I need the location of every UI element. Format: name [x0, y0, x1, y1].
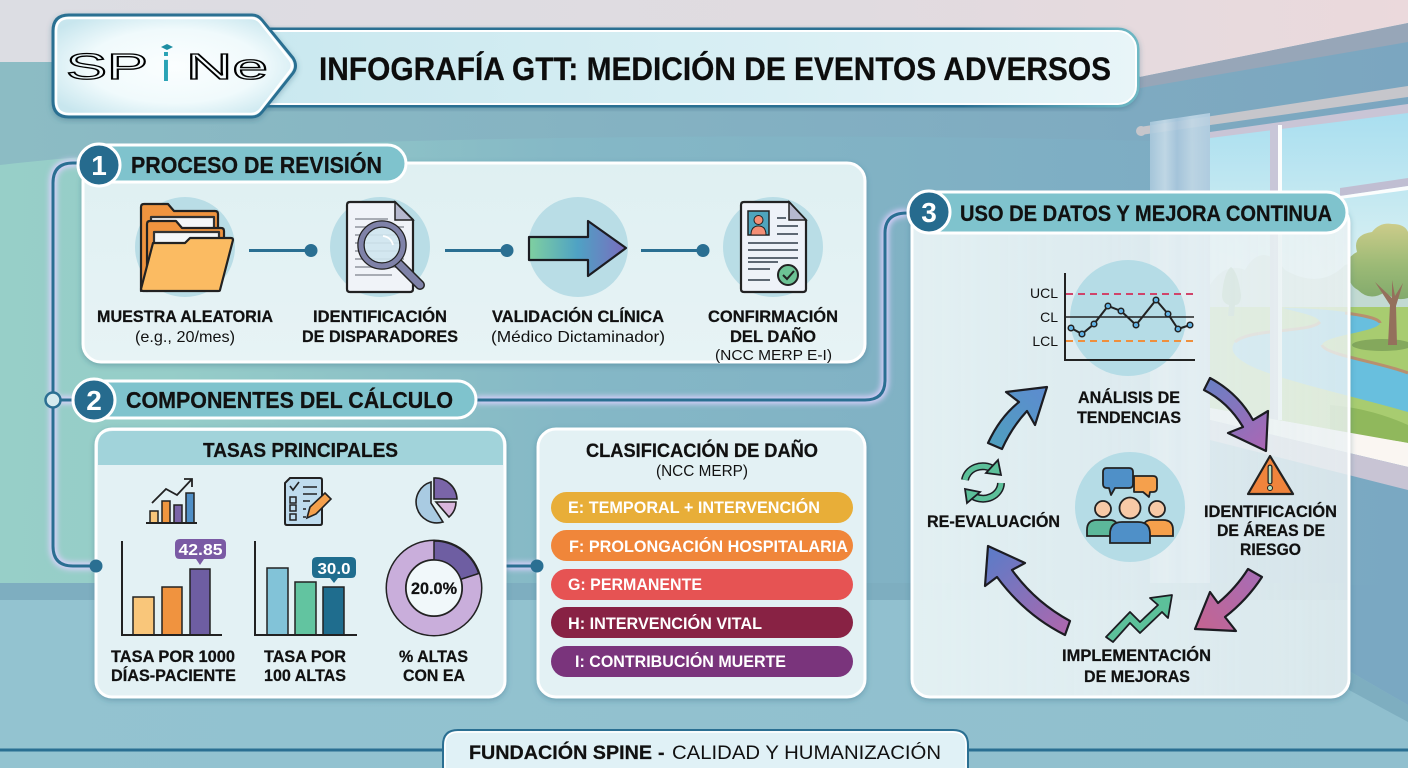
- step label: CONFIRMACIÓN: [708, 307, 838, 326]
- footer label: CALIDAD Y HUMANIZACIÓN: [672, 741, 941, 764]
- control chart: UCL: [1030, 285, 1058, 301]
- logo wordmark: Ne: [186, 46, 268, 87]
- label: identificacion de areas de riesgo: DE ÁREAS DE: [1217, 521, 1325, 540]
- footer rule: [0, 748, 1408, 752]
- label: analisis de tendencias: [1077, 388, 1181, 427]
- label: identificacion de areas de riesgo: IDENTIFICACIÓN: [1204, 502, 1337, 521]
- chart label: [111, 648, 236, 685]
- icon: gradient arrow: [529, 221, 626, 276]
- pill H: H: INTERVENCIÓN VITAL: [568, 614, 762, 633]
- control chart: LCL: [1032, 333, 1058, 349]
- label: analisis de tendencias: ANÁLISIS DE: [1078, 388, 1180, 407]
- step: confirmacion del dano: [708, 197, 838, 364]
- footer label: [443, 730, 968, 768]
- chart label: TASA POR: [264, 648, 346, 666]
- pill E: [551, 492, 853, 523]
- pill E: E: TEMPORAL + INTERVENCIÓN: [568, 498, 820, 517]
- icon: refresh arrows: [965, 460, 1001, 503]
- icon: warning triangle: [1248, 456, 1293, 494]
- connector node 3: [641, 244, 710, 257]
- connector node 2: [445, 244, 514, 257]
- step: validacion clinica: [491, 197, 665, 346]
- header: title bar: [240, 29, 1138, 106]
- control chart: [1030, 260, 1195, 376]
- value badge: [312, 557, 356, 583]
- value badge: 42.85: [178, 542, 223, 559]
- chart label: CON EA: [403, 667, 465, 685]
- value badge: [175, 539, 226, 565]
- baseboard: [0, 583, 1408, 722]
- step 2 heading: [73, 379, 476, 421]
- label: implementacion de mejoras: DE MEJORAS: [1084, 668, 1190, 686]
- chart label: % ALTAS: [399, 648, 468, 666]
- pill F: [551, 530, 853, 561]
- step label: VALIDACIÓN CLÍNICA: [492, 307, 664, 326]
- pill H: [551, 607, 853, 638]
- control chart: CL: [1040, 309, 1058, 325]
- label: identificacion de areas de riesgo: [1204, 502, 1337, 559]
- step 2 heading: COMPONENTES DEL CÁLCULO: [126, 386, 453, 413]
- step: confirmacion del dano: DEL DAÑO: [730, 326, 816, 346]
- icon: folders: [141, 204, 233, 291]
- icon: growth arrow: [1106, 595, 1172, 642]
- chart: donut porcentaje altas: [396, 541, 479, 685]
- pill G: G: PERMANENTE: [568, 575, 702, 594]
- label: re-evaluacion: RE-EVALUACIÓN: [927, 512, 1060, 531]
- pale tree: [1222, 267, 1241, 316]
- icon: document with magnifier: [347, 202, 420, 292]
- step 3 heading: 3: [921, 197, 937, 228]
- value badge: 30.0: [318, 561, 351, 578]
- step: confirmacion del dano: (NCC MERP E-I): [715, 347, 832, 364]
- window glass and landscape: [1210, 110, 1408, 445]
- arrow: to re-evaluacion: [985, 546, 1070, 635]
- icon: checklist with pencil: [285, 478, 331, 525]
- logo wordmark: SP: [66, 46, 148, 87]
- label: identificacion de areas de riesgo: RIESGO: [1240, 541, 1301, 559]
- chart label: [399, 648, 468, 685]
- classification heading: (NCC MERP): [656, 463, 748, 480]
- footer label: -: [658, 742, 664, 764]
- step 3 heading: [908, 191, 1347, 233]
- label: implementacion de mejoras: [1062, 646, 1211, 686]
- title: INFOGRAFÍA GTT: MEDICIÓN DE EVENTOS ADVERSOS: [319, 51, 1111, 87]
- arrow: to implementacion: [1195, 569, 1262, 631]
- step: validacion clinica: (Médico Dictaminador): [491, 329, 665, 346]
- step: muestra aleatoria: [97, 197, 273, 346]
- curtain rod: [1140, 86, 1408, 135]
- tasas header: [98, 431, 503, 465]
- step: identificacion de disparadores: [302, 197, 458, 346]
- arrow: to identificacion: [1204, 378, 1268, 451]
- curtain: [1150, 113, 1210, 600]
- panel 3: uso de datos y mejora continua: [908, 191, 1349, 697]
- chart label: DÍAS-PACIENTE: [111, 666, 236, 685]
- tasas header: TASAS PRINCIPALES: [203, 440, 398, 462]
- icon: pie chart: [416, 478, 457, 523]
- chart label: TASA POR 1000: [111, 648, 235, 666]
- label: analisis de tendencias: TENDENCIAS: [1077, 409, 1181, 427]
- window frames: [1210, 104, 1408, 490]
- panel: tasas principales: [96, 429, 505, 697]
- logo badge: [53, 15, 296, 117]
- connector end dots: [90, 560, 544, 572]
- chart: tasa por 100 altas: [255, 541, 357, 685]
- label: implementacion de mejoras: IMPLEMENTACIÓN: [1062, 646, 1211, 665]
- chart label: [264, 648, 346, 685]
- step label: IDENTIFICACIÓN: [313, 307, 447, 326]
- pill I: I: CONTRIBUCIÓN MUERTE: [575, 652, 786, 671]
- step: identificacion de disparadores: DE DISPARADORES: [302, 328, 458, 346]
- chart: tasa por 1000 dias-paciente: [111, 539, 236, 685]
- icon: growth bars: [146, 479, 197, 523]
- step: muestra aleatoria: (e.g., 20/mes): [135, 329, 235, 346]
- step 1 heading: PROCESO DE REVISIÓN: [131, 151, 382, 178]
- classification heading: [586, 440, 818, 480]
- connector lines: [46, 163, 907, 566]
- panel: clasificacion de dano: [538, 429, 865, 697]
- pill F: F: PROLONGACIÓN HOSPITALARIA: [569, 537, 848, 556]
- icon: team discussion: [1075, 452, 1185, 562]
- icon: patient record with check: [741, 202, 806, 292]
- step 1 heading: 1: [91, 150, 107, 181]
- step 3 heading: USO DE DATOS Y MEJORA CONTINUA: [960, 201, 1332, 226]
- panel 1: proceso de revision: [78, 144, 865, 364]
- classification heading: CLASIFICACIÓN DE DAÑO: [586, 440, 818, 462]
- step 2 heading: 2: [86, 385, 102, 416]
- arrow: to analisis: [988, 387, 1047, 449]
- connector node 1: [249, 244, 318, 257]
- footer label: FUNDACIÓN SPINE: [469, 740, 652, 764]
- chart label: 100 ALTAS: [264, 667, 346, 685]
- step 1 heading: [78, 144, 406, 186]
- pill I: [551, 646, 853, 677]
- chart: donut porcentaje altas: 20.0%: [411, 580, 457, 598]
- step label: MUESTRA ALEATORIA: [97, 308, 273, 326]
- pill G: [551, 569, 853, 600]
- logo wordmark: i: [162, 46, 170, 90]
- logo wordmark: [66, 44, 268, 90]
- tree: [1347, 224, 1408, 345]
